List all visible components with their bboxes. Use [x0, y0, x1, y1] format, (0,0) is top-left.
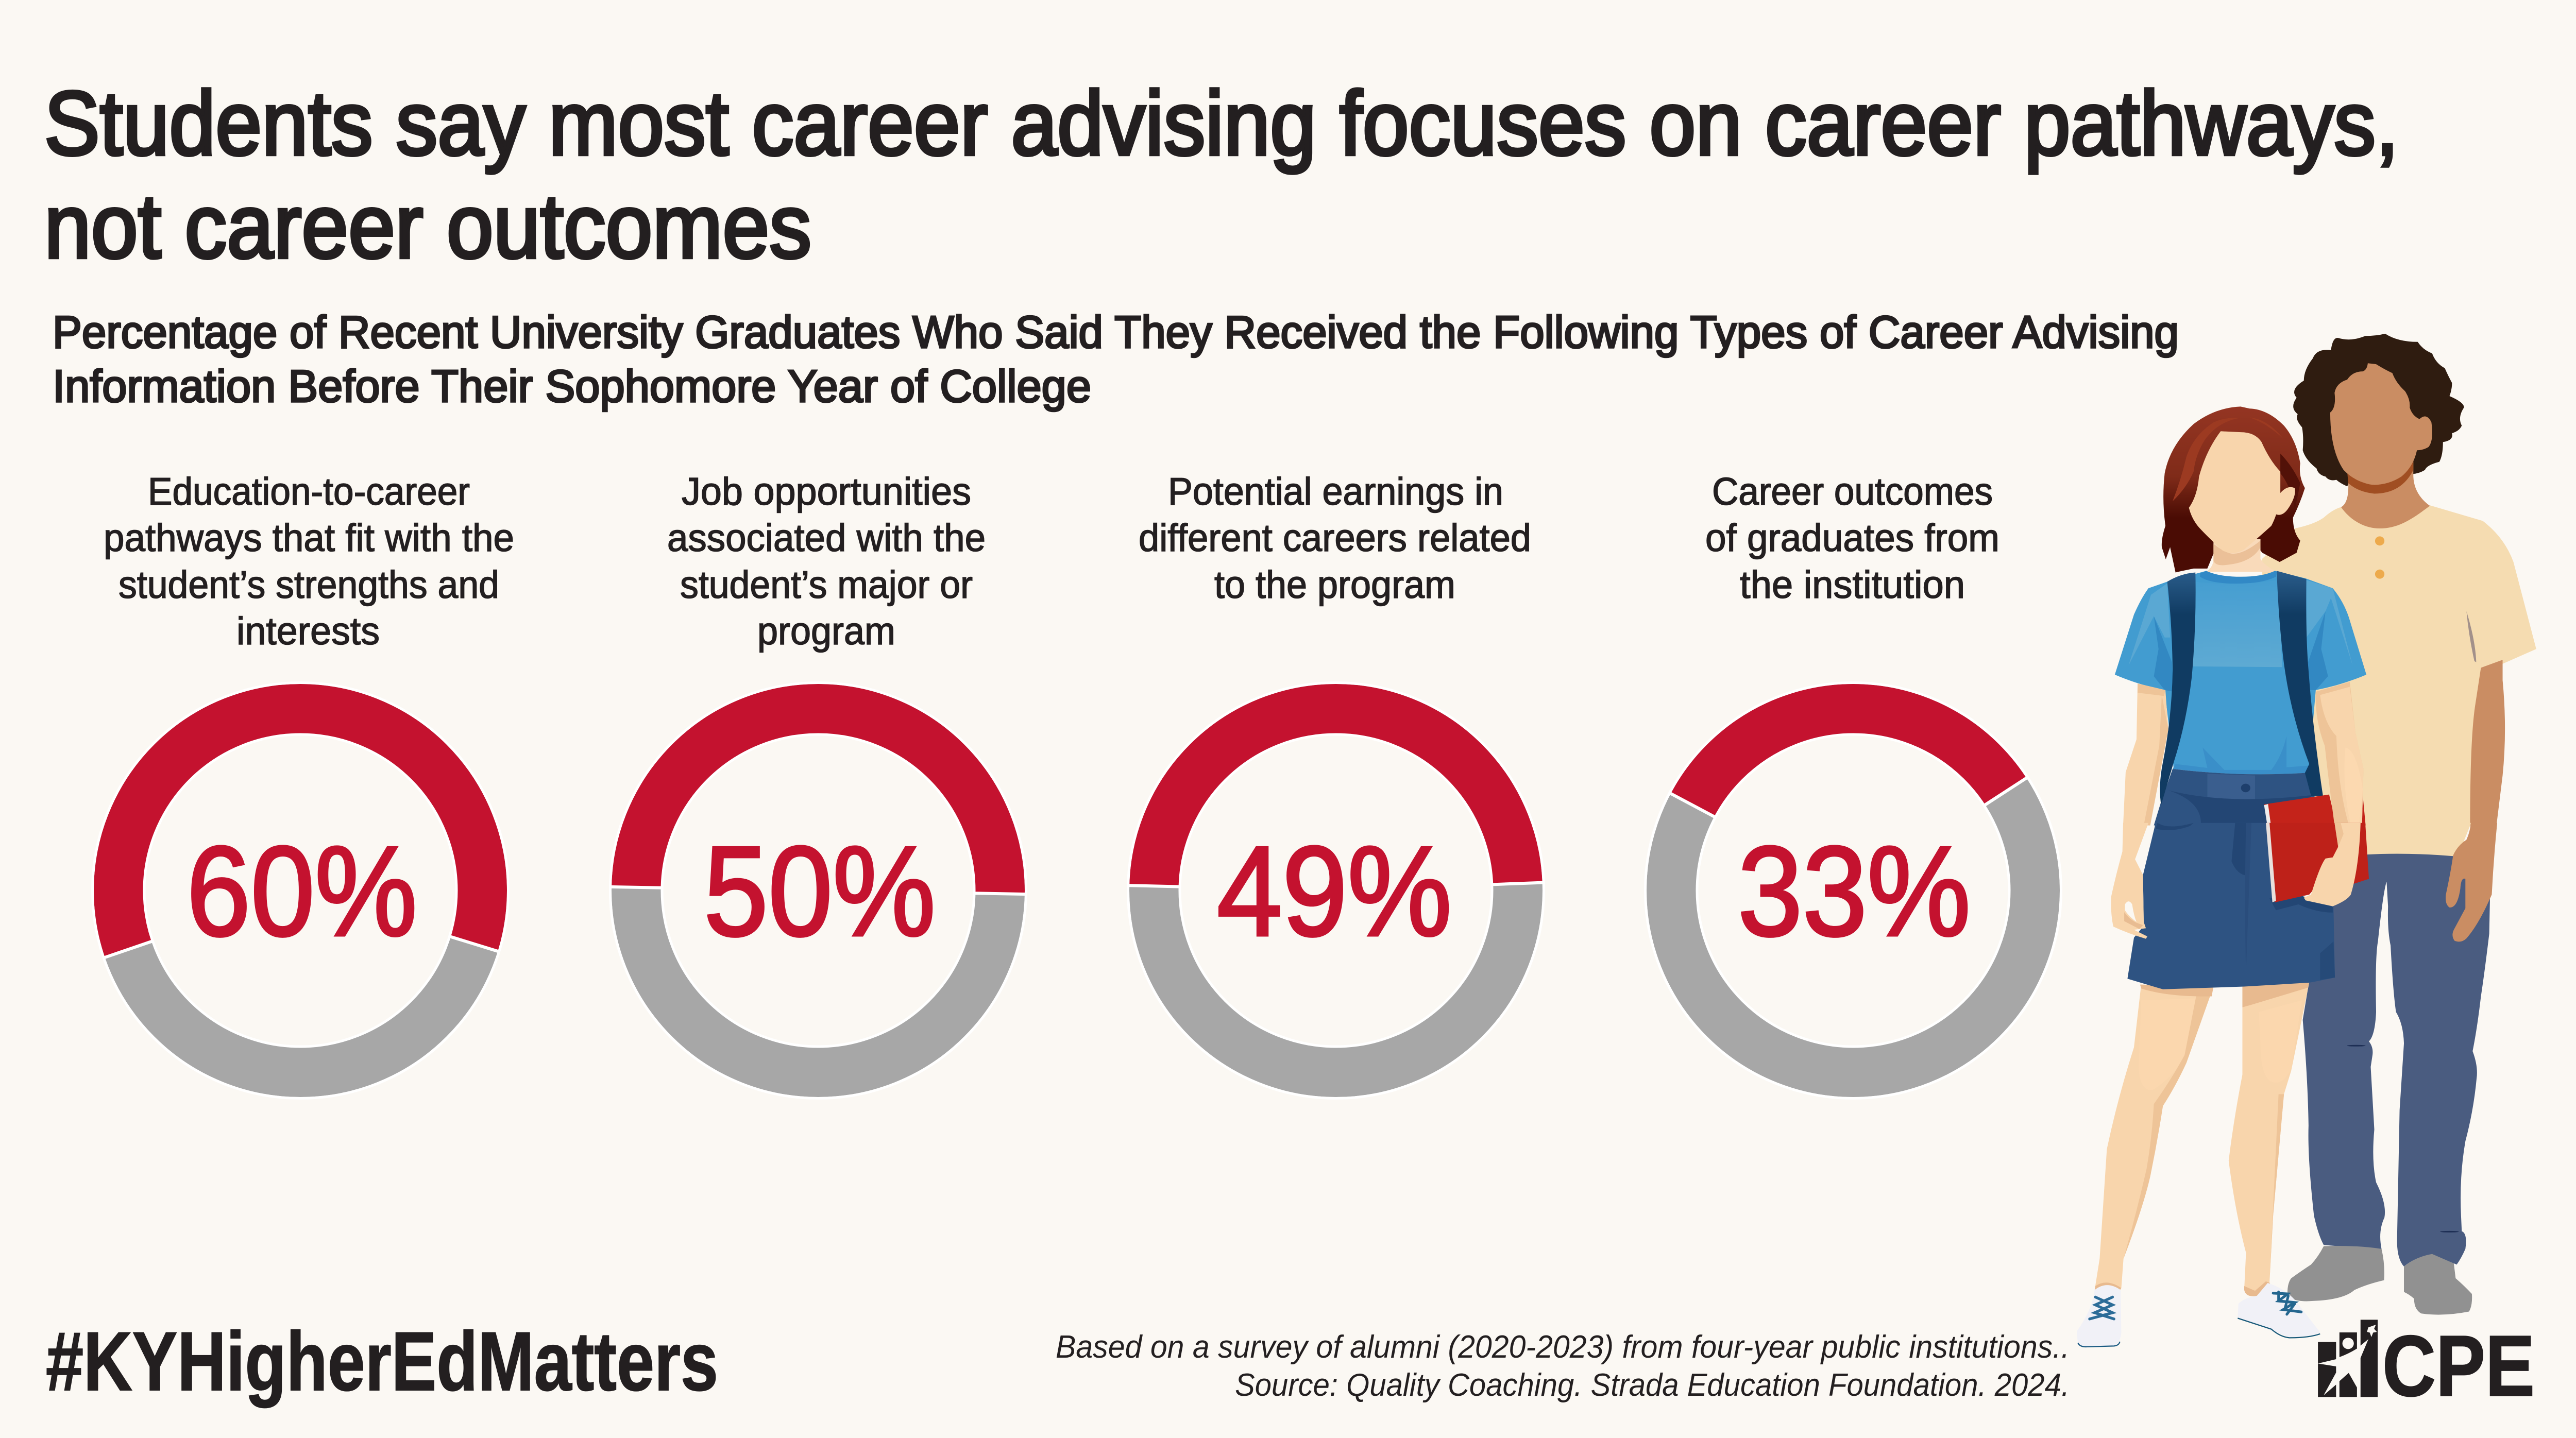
title: Students say most career advising focuses on career pathways,: [44, 73, 2399, 174]
label: potential earnings: to the program: [1214, 563, 1455, 606]
label: education-to-career pathways: Education-to-career: [148, 470, 470, 513]
label: job opportunities: Job opportunities: [682, 470, 971, 513]
value: 60%: 60%: [187, 819, 417, 963]
label: career outcomes: the institution: [1740, 563, 1965, 606]
label: job opportunities: associated with the: [667, 516, 986, 559]
label: potential earnings: [1139, 470, 1531, 606]
label: potential earnings: different careers related: [1139, 516, 1531, 559]
label: education-to-career pathways: student’s strengths and: [118, 563, 499, 606]
label: job opportunities: program: [757, 609, 895, 653]
donut chart: 49%: [1127, 683, 1545, 1098]
donut chart: 33%: [1607, 645, 2099, 1136]
source note: Source: Quality Coaching. Strada Education Foundation. 2024.: [1235, 1367, 2070, 1403]
label: job opportunities: [667, 470, 986, 653]
panel: career outcomes: [1607, 470, 2099, 1136]
panel: potential earnings: [1127, 470, 1545, 1098]
subtitle: [53, 306, 2179, 412]
donut chart: 50%: [609, 683, 1027, 1098]
label: education-to-career pathways: pathways that fit with the: [104, 516, 514, 559]
panel: education-to-career pathways: [70, 470, 531, 1121]
label: education-to-career pathways: interests: [236, 609, 380, 653]
label: potential earnings: Potential earnings in: [1168, 470, 1503, 513]
label: education-to-career pathways: [104, 470, 514, 653]
panel: job opportunities: [609, 470, 1027, 1098]
logo: CPE: [2318, 1317, 2535, 1414]
title: not career outcomes: [44, 176, 811, 277]
value: 49%: 49%: [1217, 819, 1452, 963]
value: 50%: 50%: [704, 819, 936, 963]
icon: bars with star figure: [2318, 1320, 2378, 1397]
label: career outcomes: [1705, 470, 1999, 606]
source note: Based on a survey of alumni (2020-2023) from four-year public institutions..: [1056, 1329, 2070, 1365]
illustration: two students: [2077, 334, 2536, 1347]
value: 33%: 33%: [1738, 819, 1971, 963]
source note: [1056, 1329, 2070, 1403]
figure: man in cream t-shirt: [2262, 334, 2536, 1315]
figure: woman with backpack and book: [2077, 406, 2369, 1347]
subtitle: Percentage of Recent University Graduates Who Said They Received the Following Types of Career Advising: [53, 306, 2179, 357]
label: job opportunities: student’s major or: [680, 563, 973, 606]
title: [44, 73, 2399, 277]
label: career outcomes: Career outcomes: [1712, 470, 1993, 513]
wordmark: CPE: [2382, 1317, 2535, 1414]
label: career outcomes: of graduates from: [1705, 516, 1999, 559]
subtitle: Information Before Their Sophomore Year of College: [53, 361, 1091, 412]
donut chart: 60%: [70, 660, 531, 1121]
hashtag: #KYHigherEdMatters: [46, 1315, 718, 1408]
